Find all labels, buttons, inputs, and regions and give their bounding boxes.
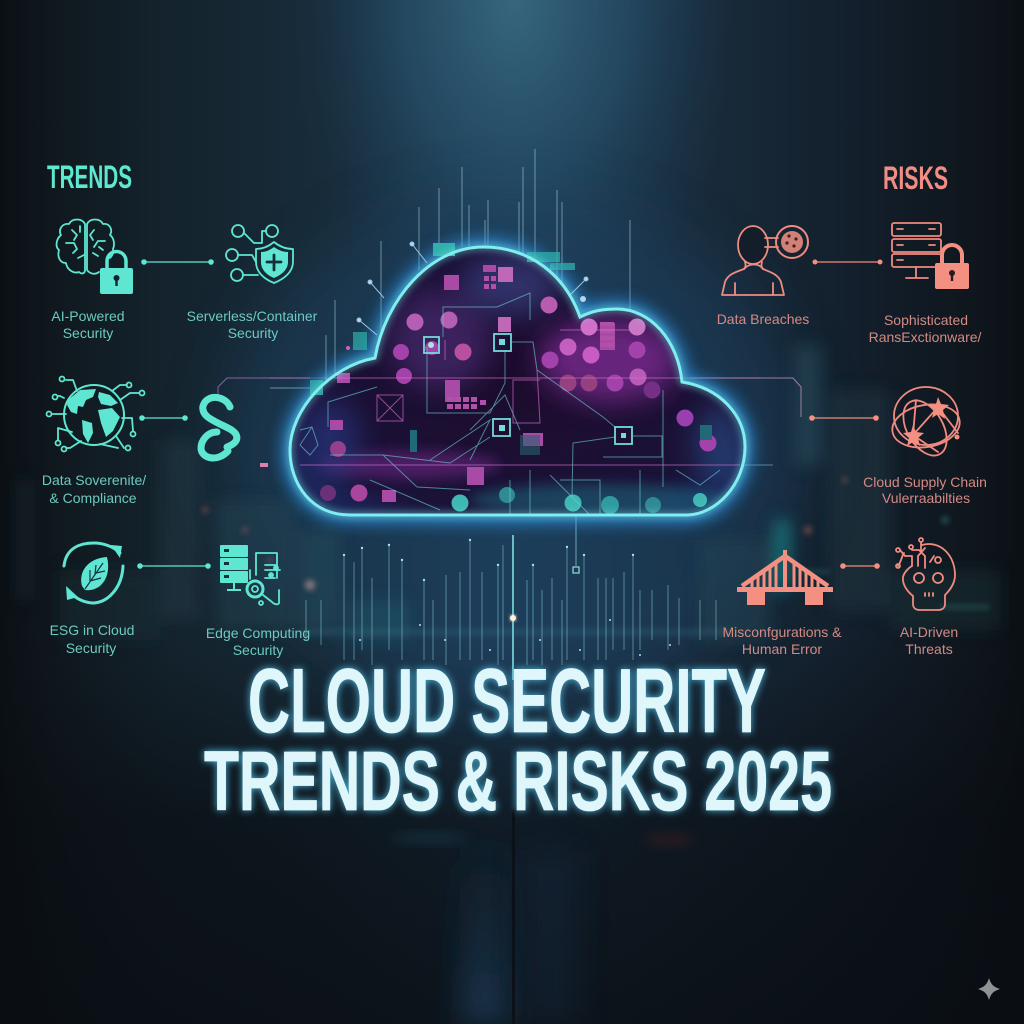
icon: edge computing servers [220,545,280,605]
node squares [424,334,632,444]
label: ESG in Cloud Security: Security [66,640,116,656]
label: Data Sovereinte & Compliance: & Compliance [49,490,137,506]
icon: AI skull [896,538,955,610]
icon: chain link [201,397,237,458]
connector [137,563,211,569]
connector [812,260,882,264]
icon: broken bridge [737,550,833,605]
central cloud [290,242,750,516]
connector [141,259,214,265]
antenna pins [346,242,588,350]
icon: ESG leaf cycle [64,543,123,603]
heading: risks: RISKS [883,160,948,196]
cloud teal panels behind outline [310,243,575,395]
label: Misconfigurations & Human Error: Misconfgurations & [722,624,842,640]
label: Edge Computing Security: Edge Computing [206,625,310,641]
label: Cloud Supply Chain Vulnerabilities: Cloud Supply Chain [863,474,987,490]
connector [139,415,188,421]
label: Edge Computing Security: Security [233,642,283,658]
connector [809,415,879,421]
label: AI-Powered Security: AI-Powered [51,308,125,324]
icon: AI brain with lock [57,220,133,294]
heading: trends: TRENDS [47,159,132,195]
cloud circuitry [290,255,750,516]
cloud outline [290,247,745,515]
icon: supply chain rings [889,387,963,463]
icon: container shield [226,225,293,283]
icon: globe with circuits [46,376,144,452]
label: Cloud Supply Chain Vulnerabilities: Vulerraabilties [882,490,970,506]
panel: risks [717,223,987,657]
blurred city skyline [20,345,1000,640]
icon: sparkle watermark [978,978,1000,1000]
icon: server with lock [892,223,969,289]
title [204,651,832,828]
label: Sophisticated Ransomware Extortion: RansExctionware/ [869,329,982,345]
label: Data Breaches: Data Breaches [717,311,809,327]
data rain below the cloud [300,515,730,680]
label: Data Sovereinte & Compliance: Data Soverenite/ [42,472,146,488]
icon: data breach person [722,226,808,295]
data rain above the cloud [326,149,630,400]
label: Serverless/Container Security: Serverless/Container [187,308,318,324]
pixel grids [447,276,614,409]
panel: trends [42,220,318,658]
label: AI-Driven Threats: AI-Driven [900,624,958,640]
label: Sophisticated Ransomware Extortion: Sophisticated [884,312,968,328]
label: Misconfigurations & Human Error: Human Error [742,641,822,657]
connector lines from cloud [218,378,801,467]
connector [840,563,880,569]
label: Serverless/Container Security: Security [228,325,278,341]
label: AI-Driven Threats: Threats [905,641,953,657]
label: AI-Powered Security: Security [63,325,113,341]
label: ESG in Cloud Security: ESG in Cloud [50,622,134,638]
